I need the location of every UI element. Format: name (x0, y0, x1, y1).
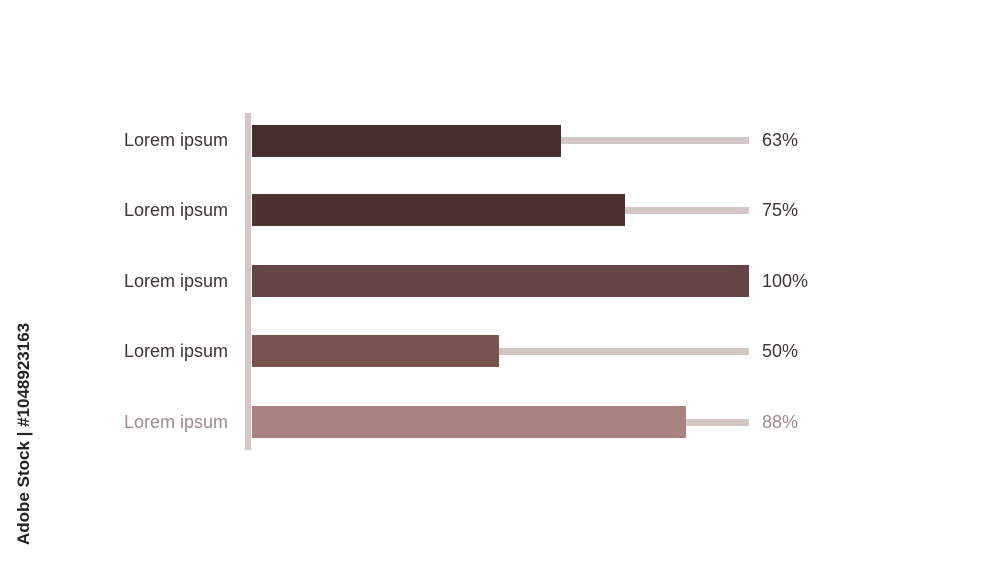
track (252, 137, 749, 144)
bar (252, 125, 561, 157)
row 4 (124, 335, 798, 367)
bar (252, 194, 625, 226)
value: 100% (762, 271, 808, 291)
label: Lorem ipsum (124, 200, 228, 220)
row 2 (124, 194, 798, 226)
label: Lorem ipsum (124, 341, 228, 361)
label: Lorem ipsum (124, 412, 228, 432)
value: 50% (762, 341, 798, 361)
value: 63% (762, 130, 798, 150)
row 1 (124, 125, 798, 157)
bar (252, 335, 499, 367)
label: Lorem ipsum (124, 271, 228, 291)
bar (252, 406, 686, 438)
axis line (245, 113, 251, 450)
row 5 (124, 406, 798, 438)
track (252, 419, 749, 426)
label: Lorem ipsum (124, 130, 228, 150)
bar (252, 265, 749, 297)
track (252, 207, 749, 214)
row 3 (124, 265, 808, 297)
track (252, 348, 749, 355)
watermark side text: Adobe Stock | #1048923163 (14, 323, 33, 545)
value: 88% (762, 412, 798, 432)
value: 75% (762, 200, 798, 220)
